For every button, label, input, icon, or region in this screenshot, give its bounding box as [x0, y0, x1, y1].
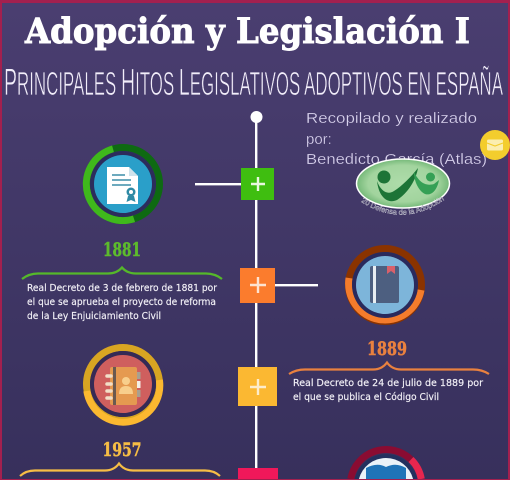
description 1881: Real Decreto de 3 de febrero de 1881 por	[27, 283, 218, 294]
description 1889	[293, 378, 484, 403]
icon: certificate document	[86, 148, 160, 221]
description 1889: el que se publica el Código Civil	[293, 391, 439, 403]
title: Adopción y Legislación I	[24, 11, 470, 52]
brace 1957	[20, 464, 220, 476]
milestone 1889	[240, 248, 489, 403]
logo: defensa de la adopción: 20 Defensa de la Adopción	[361, 197, 444, 215]
credit text	[306, 110, 487, 168]
credit text: Benedicto García (Atlas)	[306, 151, 487, 168]
description 1889: Real Decreto de 24 de julio de 1889 por	[293, 378, 484, 389]
brace 1881	[22, 268, 222, 279]
connector 1881	[195, 183, 241, 185]
description 1881: de la Ley Enjuiciamiento Civil	[27, 311, 161, 322]
timeline axis	[250, 111, 262, 480]
bottom border strip	[0, 479, 510, 480]
logo: defensa de la adopción	[356, 158, 450, 215]
description 1881: el que se aprueba el proyecto de reforma	[27, 297, 216, 308]
plus marker pink	[238, 468, 278, 479]
connector 1889	[275, 284, 318, 286]
description 1881	[27, 283, 218, 322]
brace 1889	[289, 362, 489, 374]
year 1889: 1889	[367, 338, 407, 360]
milestone 1881	[22, 148, 274, 322]
milestone partial, bottom	[0, 450, 510, 480]
credit text: Recopilado y realizado	[306, 110, 477, 127]
plus marker 1881	[241, 168, 274, 200]
milestone 1957	[20, 348, 277, 476]
icon: book	[348, 248, 422, 322]
year 1881: 1881	[103, 239, 141, 261]
credit text: por:	[306, 131, 332, 148]
plus marker 1889	[240, 268, 275, 303]
year 1957: 1957	[102, 439, 142, 461]
icon: open book, partial	[351, 450, 421, 479]
icon: address book	[86, 348, 160, 422]
mail button	[480, 130, 510, 160]
plus marker 1957	[238, 367, 277, 406]
